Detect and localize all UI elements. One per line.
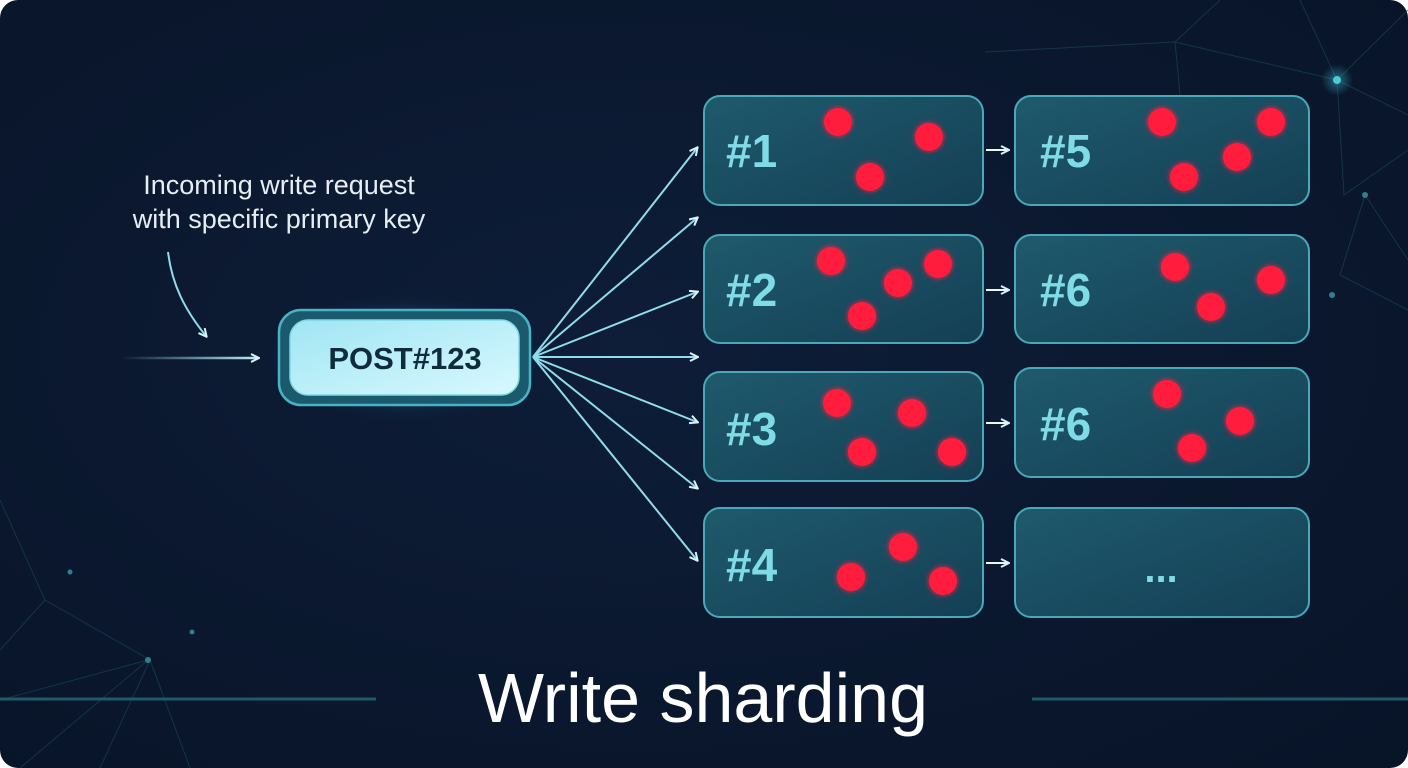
chain arrows (986, 150, 1008, 563)
shard labels: #5 (1040, 125, 1091, 177)
shard boxes (704, 96, 1309, 617)
shard labels: #3 (726, 403, 777, 455)
shard labels (726, 125, 1091, 591)
shard labels: #6 (1040, 398, 1091, 450)
shard labels: #6 (1040, 264, 1091, 316)
shard labels: #1 (726, 125, 777, 177)
shard labels: #4 (726, 539, 778, 591)
caption: incoming write request: with specific primary key (132, 204, 426, 234)
ellipsis label: ... (1144, 547, 1178, 591)
caption: incoming write request (132, 170, 426, 234)
arrow: incoming line (120, 357, 258, 359)
data dots (817, 108, 1285, 595)
arrow: curved caption pointer (168, 252, 206, 336)
POST#123 key box (270, 300, 542, 415)
title: Write sharding (478, 659, 928, 737)
shard labels: #2 (726, 264, 777, 316)
caption: incoming write request: Incoming write request (143, 170, 415, 200)
POST#123 key box: POST#123 (328, 341, 482, 376)
fan-out arrows (533, 148, 697, 560)
